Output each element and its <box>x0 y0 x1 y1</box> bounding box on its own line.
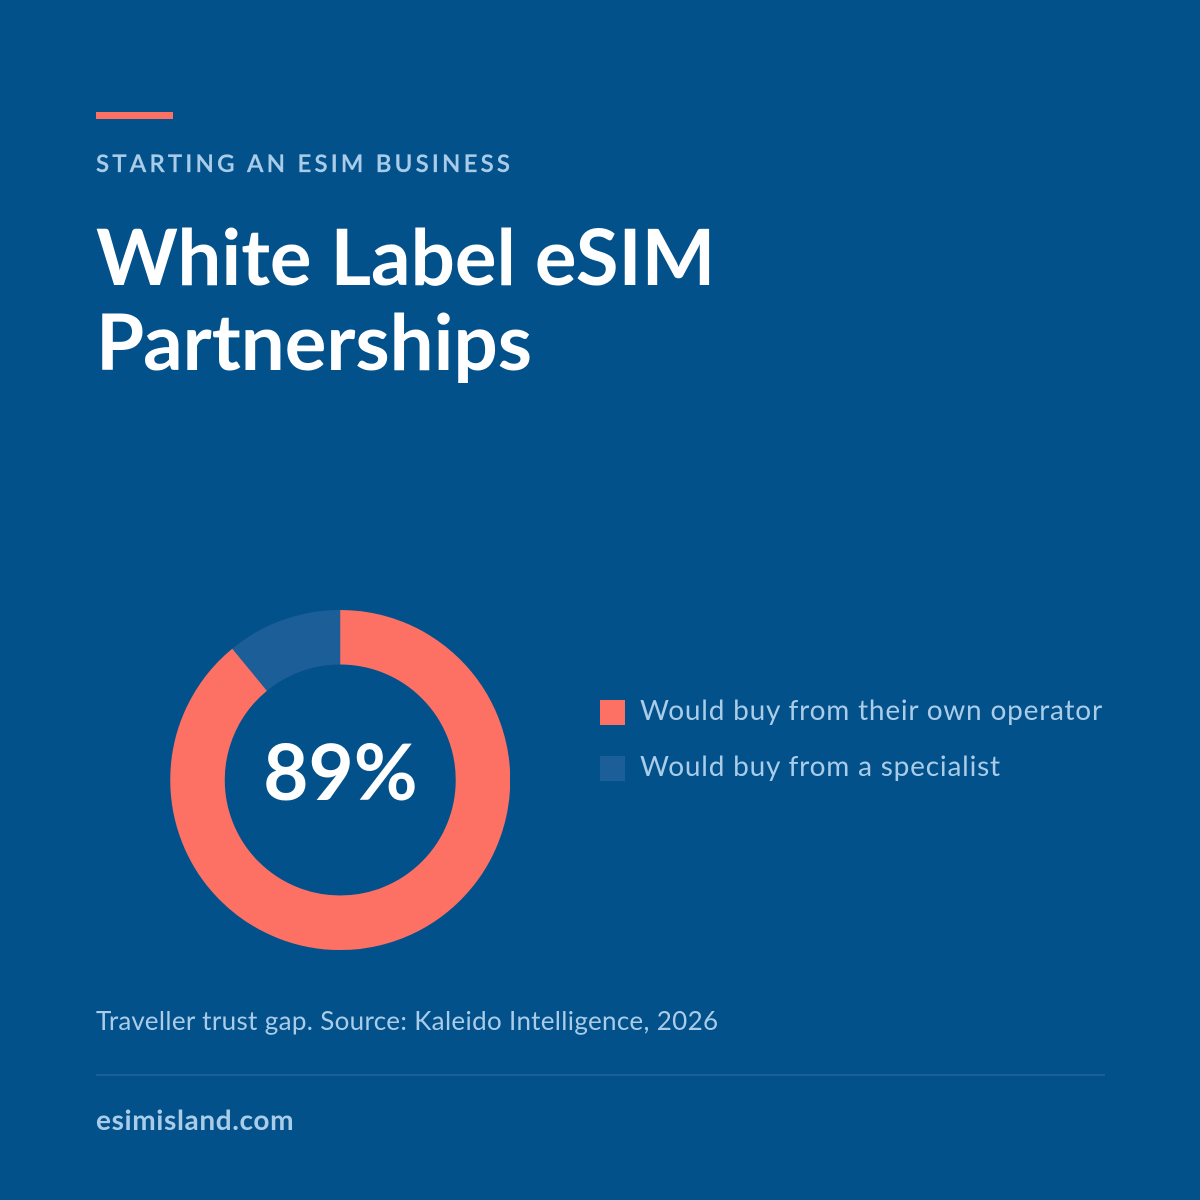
donut value: 89% <box>263 723 418 817</box>
segment: specialist 11% <box>198 637 483 923</box>
segment: own operator 89% <box>198 637 483 923</box>
legend label: own operator: Would buy from their own operator <box>640 692 1103 726</box>
legend label: specialist: Would buy from a specialist <box>640 748 1001 782</box>
title <box>96 208 715 387</box>
source note: Traveller trust gap. Source: Kaleido Intelligence, 2026 <box>96 1004 718 1036</box>
legend <box>600 692 1103 782</box>
legend swatch: own operator <box>600 700 625 725</box>
eyebrow label: STARTING AN ESIM BUSINESS <box>96 149 513 178</box>
title: White Label eSIM <box>96 208 715 302</box>
donut chart <box>170 610 510 950</box>
title: Partnerships <box>96 293 532 387</box>
accent bar <box>96 112 173 119</box>
legend swatch: specialist <box>600 756 625 781</box>
footer site name: esimisland.com <box>96 1102 294 1136</box>
footer divider <box>96 1074 1105 1076</box>
